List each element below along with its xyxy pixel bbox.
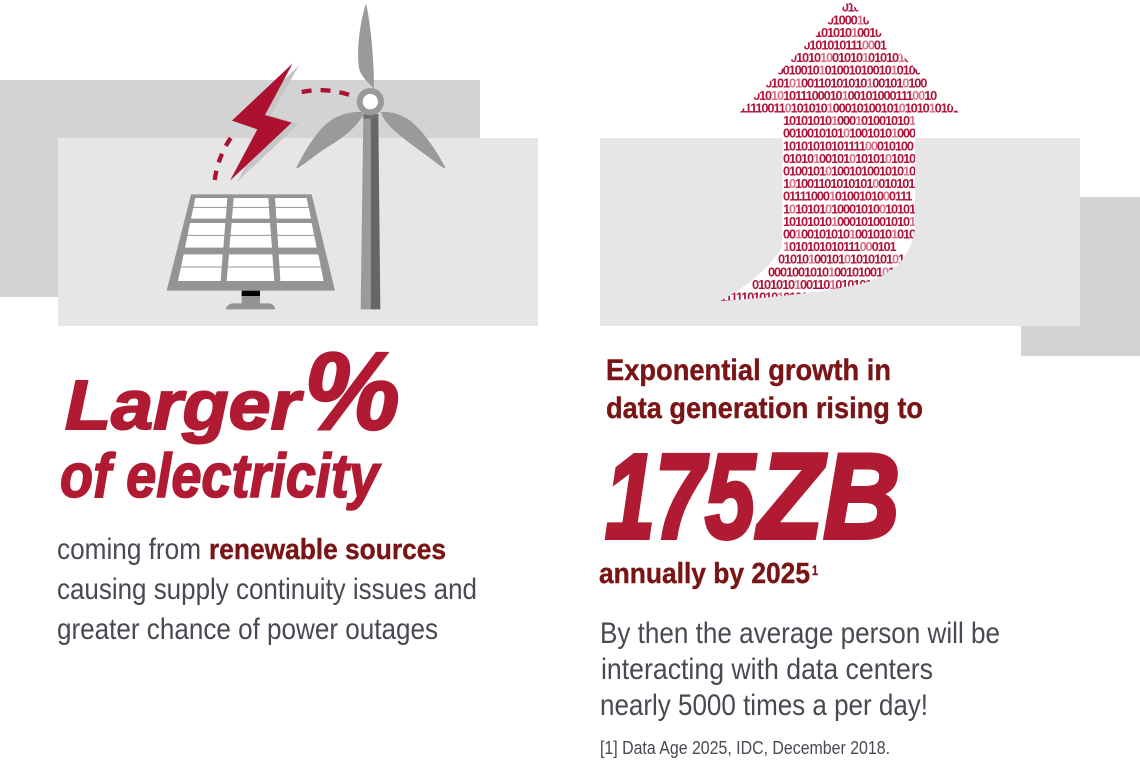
arrow: dashed arc from solar panel <box>215 136 232 180</box>
text block: renewable sources description: greater chance of power outages <box>57 613 438 646</box>
icon: binary data arrow: 0111100010100101000111 <box>783 189 912 204</box>
icon: binary data arrow: 010101010011010101010 <box>752 277 878 292</box>
icon: binary data arrow <box>720 0 966 304</box>
text block: average person <box>600 617 1000 722</box>
heading: exponential growth: Exponential growth in <box>606 354 891 387</box>
icon: binary data arrow: 0100101010010100101010 <box>783 164 916 178</box>
text block: renewable sources description: coming from <box>57 533 201 566</box>
heading: exponential growth: data generation rising to <box>606 392 923 425</box>
icon: binary data arrow: 0101010010101010101010 <box>783 151 916 166</box>
text block: renewable sources description <box>57 533 477 646</box>
icon: wind turbine <box>296 3 446 309</box>
icon: binary data arrow: 11110011010101010001010010101010101010 <box>740 100 966 116</box>
icon: binary data arrow: 10101010010 <box>815 25 882 40</box>
footnote: [1] Data Age 2025, IDC, December 2018. <box>600 738 890 758</box>
big number: 175 ZB <box>605 428 900 564</box>
icon: binary data arrow: 0010010101010010101000 <box>783 126 916 141</box>
text block: average person: nearly 5000 times a per day! <box>600 689 928 722</box>
text block: renewable sources description: renewable sources <box>209 534 446 566</box>
heading: Larger %: Larger <box>65 366 304 444</box>
text: annually by 2025: 1 <box>812 562 818 578</box>
icon: binary data arrow: 01010100101010101010 <box>790 50 911 65</box>
icon: binary data arrow: 1010101010111100010100 <box>783 138 914 153</box>
icon: binary data arrow: 0100010 <box>827 12 870 27</box>
icon: binary data arrow: 01010101110001 <box>803 38 887 52</box>
icon: binary data arrow: 0001001010100101001010 <box>768 264 901 279</box>
big number: 175 ZB: ZB <box>755 428 900 564</box>
icon: binary data arrow: 0101010111000101001010001110010 <box>753 88 937 103</box>
heading: Larger % <box>65 330 400 453</box>
panel: left light background block <box>58 138 538 326</box>
panel: left dark background block <box>0 80 480 297</box>
arrow: dashed arc from turbine <box>302 90 349 95</box>
icon: binary data arrow: 1010101010001010010101 <box>783 201 916 216</box>
icon: solar panel <box>167 194 335 309</box>
icon: binary data arrow: 1010101010001010010101 <box>783 214 916 229</box>
panel: right light background block <box>600 138 1080 326</box>
icon: binary data arrow: 0101010010101010101010 <box>778 252 911 267</box>
icon: binary data arrow: 1010101010111000101 <box>783 239 897 254</box>
icon: lightning bolt <box>230 63 299 182</box>
heading: Larger %: % <box>304 330 400 453</box>
icon: binary data arrow: 1111101010101010111000 <box>720 290 849 304</box>
icon: binary data arrow: 001001010100101001010100 <box>777 63 922 78</box>
text block: average person: interacting with data centers <box>601 653 933 686</box>
text block: renewable sources description: causing supply continuity issues and <box>57 573 477 606</box>
icon: renewable energy illustration <box>167 3 446 309</box>
heading: of electricity: of electricity <box>60 442 382 511</box>
heading: exponential growth <box>606 354 923 425</box>
text block: average person: By then the average person will be <box>600 617 1000 650</box>
icon: binary data arrow: 010 <box>842 0 861 15</box>
big number: 175 ZB: 175 <box>605 428 756 564</box>
icon: binary data arrow: 1010011010101010010101 <box>783 176 915 191</box>
icon: binary data arrow: 00100101010100101010100 <box>783 226 922 242</box>
text: annually by 2025: annually by 2025 <box>599 558 810 590</box>
icon: binary data arrow: 010101001101010101001010100 <box>765 75 927 90</box>
icon: binary data arrow: 1010101010001010010101 <box>783 113 916 128</box>
panel: right dark background block <box>1021 197 1140 356</box>
